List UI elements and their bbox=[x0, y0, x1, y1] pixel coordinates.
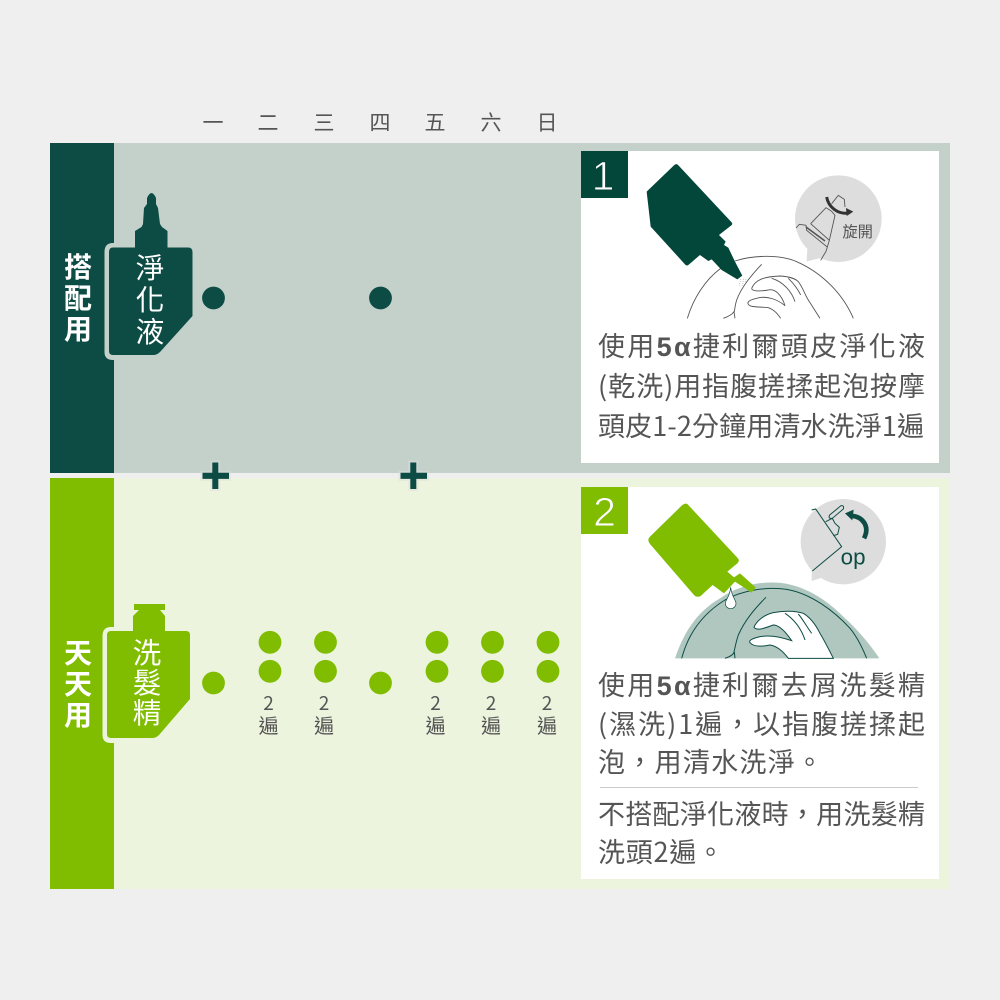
repeat labels: two washes: 遍 bbox=[537, 710, 557, 739]
weekday header: 四 bbox=[370, 107, 390, 137]
step 2 text: 泡，用清水洗淨。 bbox=[598, 741, 823, 780]
weekday header: 日 bbox=[536, 107, 558, 137]
repeat labels: two washes: 遍 bbox=[481, 710, 501, 739]
speech bubble: flip cap open: op bbox=[841, 544, 866, 569]
divider bbox=[600, 787, 918, 788]
panel: step 1 card bbox=[581, 151, 939, 463]
step number 2: 2 bbox=[593, 489, 616, 535]
repeat labels: two washes: 2 bbox=[430, 689, 441, 716]
repeat labels: two washes: 遍 bbox=[426, 710, 446, 739]
label: combined use: 用 bbox=[64, 308, 92, 348]
illustration: tilted shampoo bottle bbox=[648, 504, 756, 609]
illustration: tilted purifying bottle bbox=[647, 164, 742, 279]
repeat labels: two washes: 2 bbox=[263, 689, 274, 716]
weekday header: 二 bbox=[258, 107, 278, 137]
plus sign left bbox=[202, 462, 229, 489]
step number 2 bbox=[581, 487, 628, 535]
icon: shampoo bottle: 精 bbox=[133, 691, 161, 732]
icon: shampoo bottle bbox=[102, 604, 195, 743]
weekday header: 三 bbox=[314, 107, 334, 137]
step 2 text bbox=[598, 664, 925, 780]
label: combined use: 搭 bbox=[64, 246, 92, 286]
icon: purifying liquid bottle: 液 bbox=[136, 310, 164, 351]
repeat labels: two washes: 遍 bbox=[258, 710, 278, 739]
step 2 note: 不搭配淨化液時，用洗髮精 bbox=[598, 793, 925, 832]
label: combined use: 配 bbox=[64, 277, 92, 317]
step 1 text: 頭皮1-2分鐘用清水洗淨1遍 bbox=[598, 405, 924, 444]
step number 1 bbox=[581, 151, 628, 199]
weekday header bbox=[202, 107, 558, 137]
label: daily use bbox=[64, 632, 92, 734]
icon: purifying liquid bottle: 化 bbox=[136, 278, 164, 319]
panel: purifying liquid row bbox=[50, 143, 950, 473]
icon: shampoo bottle: 洗 bbox=[133, 631, 161, 672]
panel: daily shampoo row bbox=[50, 478, 950, 889]
weekday header: 一 bbox=[202, 107, 224, 137]
step 1 text: 使用5α捷利爾頭皮淨化液 bbox=[598, 325, 925, 364]
plus sign right bbox=[400, 462, 427, 489]
drop bbox=[725, 587, 736, 609]
icon: purifying liquid bottle: 淨 bbox=[136, 246, 164, 287]
label: daily use: 天 bbox=[64, 632, 92, 672]
weekday header: 五 bbox=[424, 107, 446, 137]
speech bubble: twist open bbox=[795, 175, 882, 262]
step 2 text: 使用5α捷利爾去屑洗髮精 bbox=[598, 664, 925, 703]
label: daily use: 天 bbox=[64, 663, 92, 703]
step 1 text bbox=[598, 325, 925, 444]
repeat labels: two washes: 2 bbox=[319, 689, 329, 716]
illustration: head and hand line art bbox=[687, 256, 853, 318]
step 2 note: 洗頭2遍。 bbox=[598, 831, 724, 870]
step 2 text: (濕洗)1遍，以指腹搓揉起 bbox=[598, 703, 925, 742]
icon: shampoo bottle: 髮 bbox=[133, 661, 161, 702]
speech bubble: twist open: 旋開 bbox=[842, 220, 873, 242]
repeat labels: two washes: 2 bbox=[486, 689, 496, 716]
illustration: head with hand bbox=[675, 583, 879, 658]
label: combined use bbox=[64, 246, 92, 348]
step 2 note bbox=[598, 793, 925, 870]
repeat labels: two washes bbox=[258, 689, 557, 739]
weekday header: 六 bbox=[480, 107, 502, 137]
step number 1: 1 bbox=[592, 153, 614, 199]
schedule dots: shampoo bbox=[202, 631, 559, 694]
repeat labels: two washes: 2 bbox=[542, 689, 552, 716]
icon: purifying liquid bottle bbox=[104, 193, 197, 360]
label: daily use: 用 bbox=[64, 694, 92, 734]
repeat labels: two washes: 遍 bbox=[314, 710, 334, 739]
schedule dots: purifying liquid bbox=[202, 287, 392, 309]
step 1 text: (乾洗)用指腹搓揉起泡按摩 bbox=[598, 365, 925, 404]
speech bubble: flip cap open bbox=[801, 499, 886, 584]
panel: step 2 card bbox=[581, 487, 939, 879]
